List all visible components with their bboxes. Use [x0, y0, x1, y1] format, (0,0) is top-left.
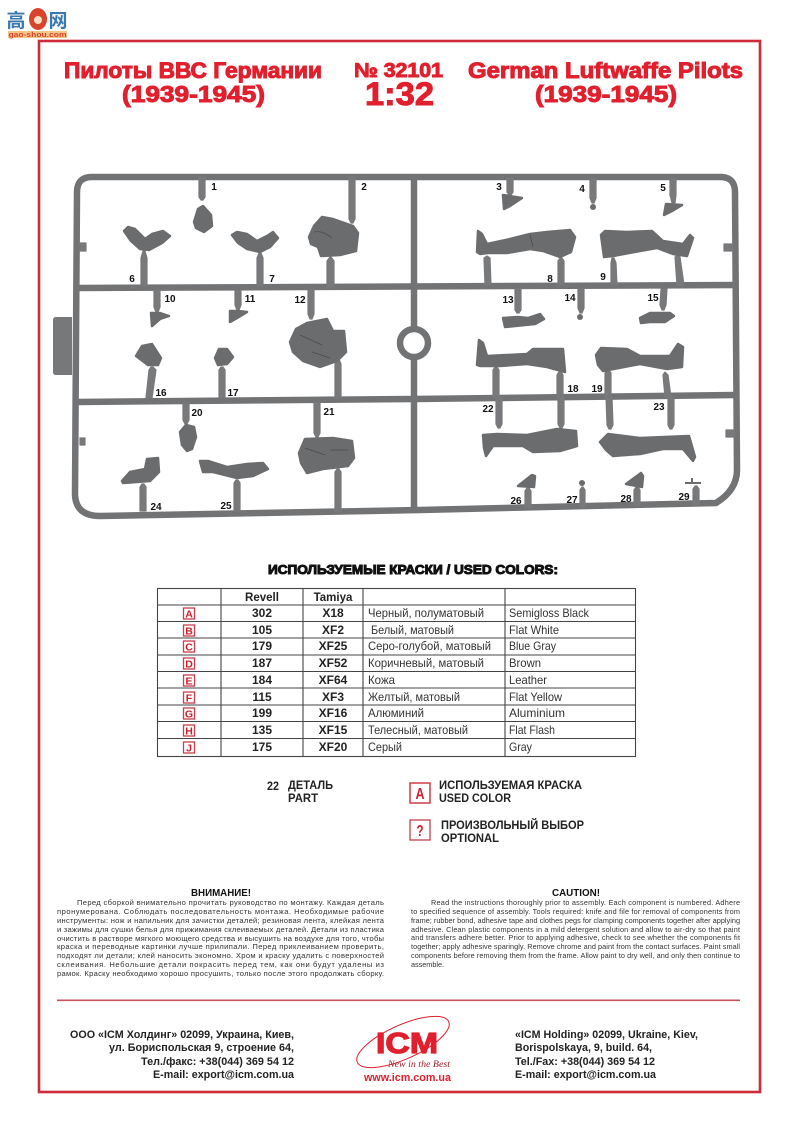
ICM logo: www.icm.com.ua — [363, 1072, 452, 1084]
English color names: Aluminium — [509, 706, 565, 720]
part 22: leg — [482, 404, 577, 456]
part 3: wedge: 3 — [496, 182, 502, 193]
Russian color names: Желтый, матовый — [368, 690, 460, 704]
color letter boxes — [184, 608, 194, 754]
Revell codes: 199 — [252, 706, 272, 720]
part 17: head: 17 — [227, 388, 239, 399]
Tamiya codes: XF52 — [319, 656, 348, 670]
Russian color names: Кожа — [368, 673, 395, 687]
color letter boxes: C — [185, 642, 193, 654]
English color names: Gray — [509, 740, 532, 754]
legend: part number: ДЕТАЛЬ — [288, 778, 333, 792]
Russian color names: Алюминий — [368, 706, 424, 720]
title: Russian: Пилоты ВВС Германии — [64, 58, 322, 83]
Tamiya codes: XF16 — [319, 706, 348, 720]
part 28: wedge: 28 — [620, 494, 632, 505]
part 25: sleeve — [200, 461, 268, 512]
Tamiya codes: XF20 — [319, 740, 348, 754]
Tamiya codes: X18 — [322, 606, 344, 620]
part 4: ball — [579, 184, 596, 210]
part 24: sleeve: 24 — [150, 502, 162, 513]
address: English: E-mail: export@icm.com.ua — [515, 1069, 657, 1081]
legend: used color: USED COLOR — [439, 791, 511, 805]
address: Russian — [70, 1029, 295, 1081]
part 21: torso: 21 — [323, 407, 335, 418]
address: English: Borispolskaya, 9, build. 64, — [515, 1042, 652, 1054]
English color names: Flat Flash — [509, 723, 555, 737]
part 4: ball: 4 — [579, 184, 585, 195]
warning text: English: adhesive. Clean plastic components in a mild detergent solution and allow to air-dry so that paint — [411, 925, 740, 934]
part 16: head — [136, 344, 167, 399]
part 28: wedge — [620, 473, 643, 505]
part 10: wedge — [151, 294, 176, 326]
part 17: head — [215, 349, 239, 399]
part 25: sleeve: 25 — [220, 501, 232, 512]
watermark logo: gao-shou.com — [8, 30, 67, 39]
part 22: leg: 22 — [482, 404, 494, 415]
part 23: leg — [600, 402, 695, 461]
Revell codes: 302 — [252, 606, 272, 620]
part 14: ball: 14 — [564, 293, 576, 304]
warning text: Russian: инструменты: нож и напильник для зачистки деталей; резиновая лента, клейкая лента — [57, 916, 385, 925]
part 1: head: 1 — [211, 182, 217, 193]
English color names: Blue Gray — [509, 639, 556, 653]
warning text: English — [411, 887, 740, 969]
legend: optional: ? — [416, 823, 424, 840]
part 20: head: 20 — [191, 408, 203, 419]
part 9: leg — [600, 231, 693, 283]
part 16: head: 16 — [155, 388, 167, 399]
title: English — [468, 58, 743, 107]
Revell codes: 179 — [252, 639, 272, 653]
address: Russian: E-mail: export@icm.com.ua — [153, 1069, 295, 1081]
part 11: wedge: 11 — [245, 294, 256, 305]
watermark logo — [6, 6, 68, 39]
legend: used color — [410, 778, 582, 805]
legend: optional: OPTIONAL — [441, 831, 499, 845]
kit number and scale — [354, 60, 443, 112]
table heading: ИСПОЛЬЗУЕМЫЕ КРАСКИ / USED COLORS: — [268, 562, 558, 577]
address: English: Tel./Fax: +38(044) 369 54 12 — [515, 1056, 655, 1068]
Revell codes: 184 — [252, 673, 272, 687]
warning text: English: assemble. — [411, 960, 444, 969]
warning text: Russian: ВНИМАНИЕ! — [191, 887, 251, 899]
legend: optional — [410, 817, 584, 845]
part 15: hand: 15 — [647, 293, 659, 304]
part 18: leg: 18 — [567, 384, 579, 395]
watermark logo: 高 — [6, 6, 26, 33]
legend: part number: PART — [288, 791, 319, 805]
Russian color names: Белый, матовый — [371, 623, 454, 637]
address: English — [515, 1029, 698, 1081]
kit number and scale: № 32101 — [354, 60, 443, 82]
Revell codes — [252, 606, 272, 754]
part 19: leg — [591, 344, 683, 395]
watermark logo: 网 — [48, 6, 68, 33]
English color names: Semigloss Black — [509, 606, 590, 620]
part 21: torso — [299, 407, 354, 473]
part 26: wedge: 26 — [510, 496, 522, 507]
Revell codes: 135 — [252, 723, 272, 737]
gates — [140, 177, 699, 512]
part 2: torso: 2 — [361, 182, 367, 193]
warning text: Russian: очистить в растворе мягкого моющего средства и высушить на воздухе для того, чтобы — [57, 934, 384, 943]
ICM logo — [350, 1006, 456, 1084]
part 12: torso — [290, 295, 346, 367]
legend: part number: 22 — [267, 779, 279, 793]
colors table — [158, 588, 636, 756]
address: Russian: Тел./факс: +38(044) 369 54 12 — [141, 1056, 294, 1068]
warning text: English: and transfers adhere better. Prior to applying adhesive, check to see whether the components fit — [411, 933, 740, 942]
warning text: English: frame; rubber bond, adhesive tape and clothes pegs for clamping components together after applying — [411, 916, 740, 925]
Russian color names — [368, 606, 491, 754]
part 13: hand — [502, 295, 544, 327]
warning text: Russian: рамок. Краску необходимо хорошо просушить, только после этого продолжать сборку. — [57, 969, 384, 978]
warning text: Russian: краска и переводные картинки лучше прилипали. Перед приклеиванием проверить, — [57, 942, 384, 951]
Tamiya codes: XF15 — [319, 723, 348, 737]
table header: Tamiya — [314, 592, 353, 604]
part 29: small bar: 29 — [678, 492, 690, 503]
tab on left of sprue — [53, 317, 72, 375]
part 7: arms: 7 — [269, 274, 275, 285]
warning text: Russian: пронумерована. Соблюдать последовательность монтажа. Необходимые рабочие — [57, 907, 384, 916]
runners — [75, 177, 737, 516]
Tamiya codes: XF3 — [322, 690, 344, 704]
warning text: Russian: склеивания. Небольшие детали покрасить перед тем, как они будут удалены из — [57, 960, 385, 969]
ICM logo: ICM — [376, 1028, 438, 1060]
legend: used color: A — [416, 786, 425, 803]
color letter boxes: J — [186, 742, 192, 754]
address: Russian: ул. Бориспольская 9, строение 64, — [109, 1042, 294, 1054]
part 8: leg — [477, 230, 575, 285]
warning text: Russian: подходят ли детали; клей наносить экономно. Хром и краску удалить с поверхностей — [57, 951, 384, 960]
Tamiya codes: XF25 — [319, 639, 348, 653]
Russian color names: Черный, полуматовый — [368, 606, 484, 620]
English color names: Brown — [509, 656, 541, 670]
part 10: wedge: 10 — [164, 294, 176, 305]
Tamiya codes — [319, 606, 348, 754]
English color names: Flat White — [509, 623, 559, 637]
warning text: Russian — [57, 887, 385, 978]
Russian color names: Серый — [368, 740, 402, 754]
part 27: ball: 27 — [566, 495, 578, 506]
English color names: Leather — [509, 673, 547, 687]
Revell codes: 175 — [252, 740, 272, 754]
title: English: (1939-1945) — [535, 81, 677, 107]
part 18: leg — [477, 340, 579, 395]
part 5: wedge: 5 — [660, 183, 666, 194]
color letter boxes: G — [185, 708, 193, 720]
warning text: English: Read the instructions thoroughly prior to assembly. Each component is numbered. Adhere — [431, 898, 740, 907]
part 9: leg: 9 — [600, 272, 606, 283]
warning text: Russian: Перед сборкой внимательно прочитать руководство по монтажу. Каждая деталь — [77, 898, 384, 907]
color letter boxes: H — [185, 726, 193, 738]
Tamiya codes: XF2 — [322, 623, 344, 637]
title: Russian — [64, 58, 322, 107]
part 19: leg: 19 — [591, 384, 603, 395]
part 15: hand — [640, 293, 674, 323]
English color names — [509, 606, 590, 754]
title: English: German Luftwaffe Pilots — [468, 58, 743, 83]
part 3: wedge — [496, 182, 522, 209]
color letter boxes: B — [185, 626, 193, 638]
title: Russian: (1939-1945) — [122, 81, 265, 107]
legend: part number — [267, 778, 333, 805]
sprue frame with parts — [53, 177, 737, 516]
warning text: English: to specified sequence of assembly. Tools required: knife and file for removal of components from — [411, 907, 740, 916]
part 20: head — [180, 408, 203, 451]
Russian color names: Телесный, матовый — [368, 723, 468, 737]
part 24: sleeve — [122, 458, 162, 513]
part 27: ball — [566, 480, 585, 506]
warning text: English: components before removing them from the frame. Allow paint to dry well, and only then continue to — [411, 951, 740, 960]
part 26: wedge — [510, 475, 535, 507]
Revell codes: 105 — [252, 623, 272, 637]
ICM logo: New in the Best — [387, 1059, 451, 1069]
English color names: Flat Yellow — [509, 690, 562, 704]
part 29: small bar — [678, 478, 701, 503]
warning text: Russian: и зажимы для сушки белья для прижимания склеиваемых деталей. Детали из пластика — [57, 925, 385, 934]
part 12: torso: 12 — [294, 295, 306, 306]
Revell codes: 115 — [252, 690, 272, 704]
color letter boxes: F — [186, 692, 193, 704]
runner ring — [400, 329, 428, 357]
part 7: arms — [232, 232, 278, 285]
address: Russian: ООО «ICM Холдинг» 02099, Украина, Киев, — [70, 1029, 294, 1041]
part 8: leg: 8 — [547, 274, 553, 285]
legend: used color: ИСПОЛЬЗУЕМАЯ КРАСКА — [439, 778, 582, 792]
Russian color names: Коричневый, матовый — [368, 656, 484, 670]
table header — [245, 592, 353, 604]
part 11: wedge — [230, 294, 256, 322]
footer divider — [57, 1000, 740, 1001]
warning text: English: together; apply adhesive sparingly. Remove chrome and paint from the contact surfaces. Paint small — [411, 942, 740, 951]
address: English: «ICM Holding» 02099, Ukraine, Kiev, — [515, 1029, 698, 1041]
legend: optional: ПРОИЗВОЛЬНЫЙ ВЫБОР — [441, 817, 584, 832]
frame pegs — [80, 243, 734, 445]
part 14: ball — [564, 293, 583, 320]
Russian color names: Серо-голубой, матовый — [368, 639, 491, 653]
Tamiya codes: XF64 — [319, 673, 348, 687]
kit number and scale: 1:32 — [365, 76, 434, 112]
part 23: leg: 23 — [653, 402, 665, 413]
part 1: head — [194, 182, 217, 232]
table header: Revell — [245, 592, 279, 604]
color letter boxes: D — [185, 658, 193, 670]
part 2: torso — [309, 182, 367, 256]
color letter boxes: A — [185, 608, 193, 620]
warning text: English: CAUTION! — [552, 887, 600, 899]
Revell codes: 187 — [252, 656, 272, 670]
part 6: arms — [124, 227, 170, 285]
part 13: hand: 13 — [502, 295, 514, 306]
color letter boxes: E — [185, 676, 193, 688]
part 5: wedge — [660, 183, 682, 215]
part 6: arms: 6 — [129, 274, 135, 285]
